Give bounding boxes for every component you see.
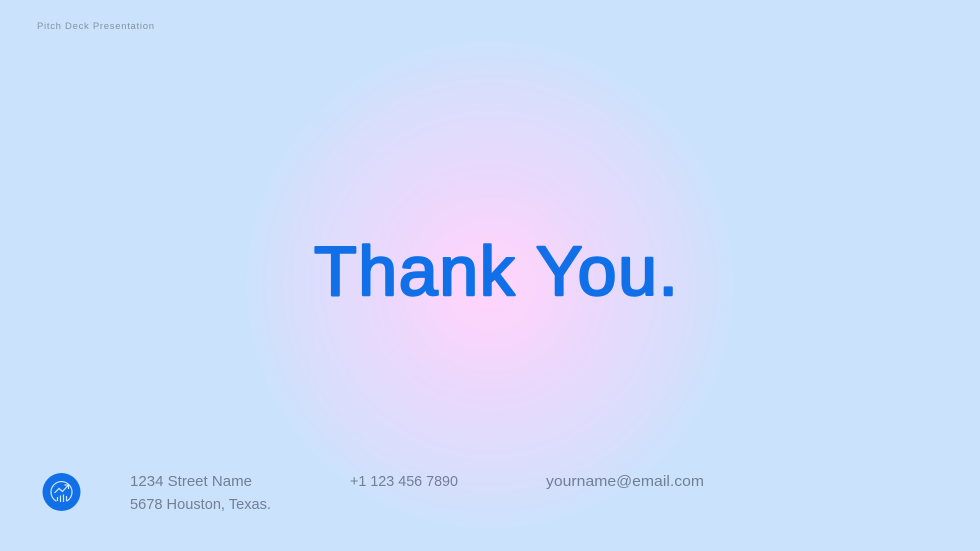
email address: yourname@email.com (546, 473, 704, 490)
header label: Pitch Deck Presentation (37, 21, 154, 32)
phone number: +1 123 456 7890 (350, 473, 458, 490)
address: 5678 Houston, Texas. (130, 496, 271, 513)
title: Thank You. (314, 232, 678, 310)
background glow (245, 40, 735, 530)
icon: growth chart badge (42, 473, 80, 511)
address: 1234 Street Name (130, 473, 252, 490)
address (130, 473, 271, 513)
